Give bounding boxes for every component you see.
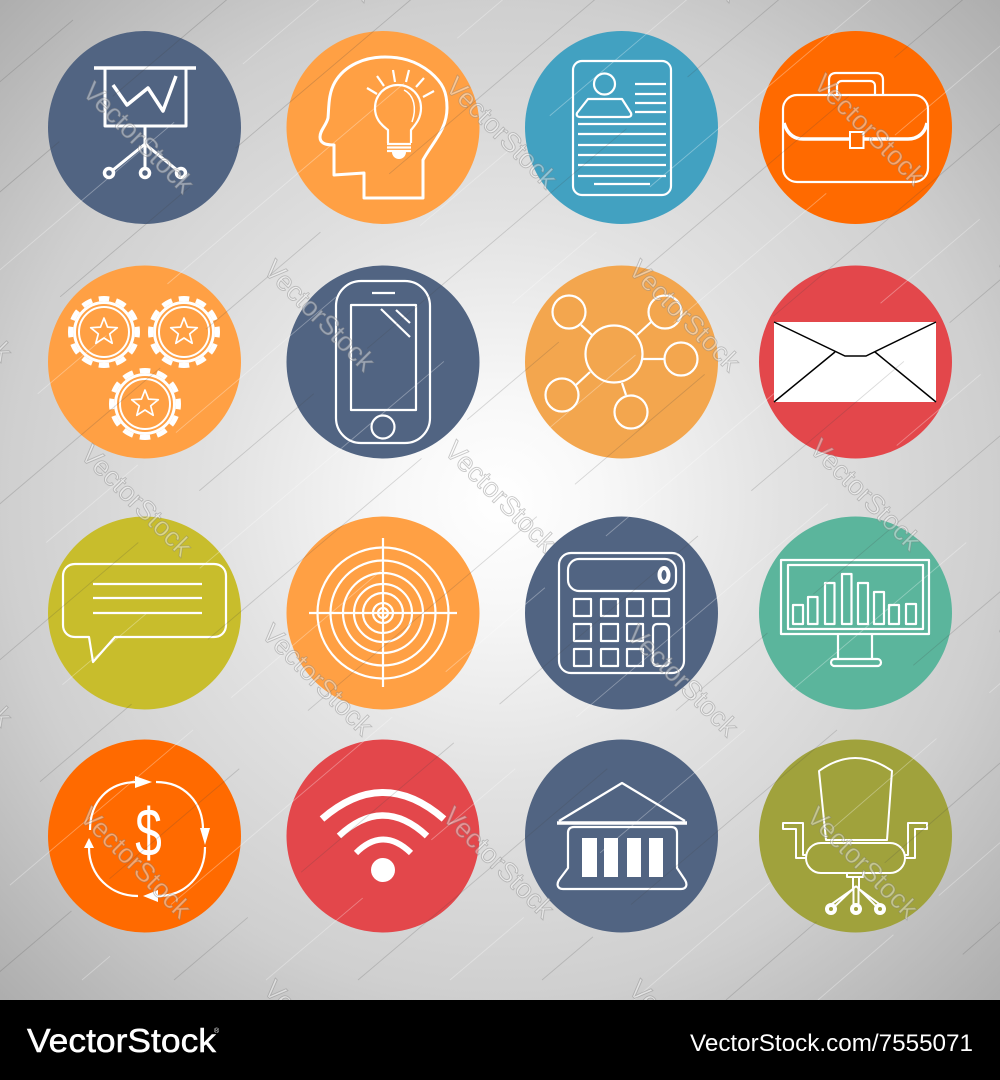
watermark text: VectorStock: [439, 435, 562, 559]
icon: office chair: [759, 740, 952, 932]
watermark text: VectorStock: [256, 618, 379, 742]
icon: network nodes: [525, 266, 718, 458]
watermark text: VectorStock: [804, 433, 927, 557]
icon: envelope: [759, 266, 952, 458]
icon: resume document: [525, 31, 718, 224]
dollar sign: $: [135, 796, 162, 871]
icon: presentation board: [48, 31, 241, 224]
icon: wifi: [286, 740, 480, 932]
footer image id: VectorStock.com/7555071: [690, 1030, 973, 1057]
icon: bank building: [525, 740, 718, 932]
icon: speech bubble: [48, 516, 241, 710]
icon: calculator: [525, 516, 718, 710]
watermark text: VectorStock: [75, 439, 198, 563]
icon: money cycle: [48, 740, 241, 932]
gear: top right: [150, 298, 218, 366]
icon: head with light bulb: [286, 31, 480, 224]
icon: monitor with bar chart: [759, 516, 952, 710]
watermark text: VectorStock: [621, 619, 744, 743]
watermark text: VectorStock: [808, 68, 931, 192]
footer bar: [0, 1000, 1000, 1080]
footer logo text: VectorStock: [27, 1022, 217, 1059]
icon: smartphone: [286, 266, 480, 458]
gear: top left: [70, 298, 138, 366]
footer registered mark: ®: [214, 1027, 220, 1035]
watermark text: VectorStock: [440, 71, 563, 195]
icon: three star gears: [48, 266, 241, 458]
watermark text: VectorStock: [801, 801, 924, 925]
watermark text: VectorStock: [623, 254, 746, 378]
watermark text: VectorStock: [258, 254, 381, 378]
icon: briefcase: [759, 31, 952, 224]
watermark text: VectorStock: [437, 801, 560, 925]
watermark text: VectorStock: [77, 76, 200, 200]
icon: target: [286, 516, 480, 710]
gear: bottom: [112, 370, 178, 438]
watermark text: VectorStock: [74, 801, 197, 925]
